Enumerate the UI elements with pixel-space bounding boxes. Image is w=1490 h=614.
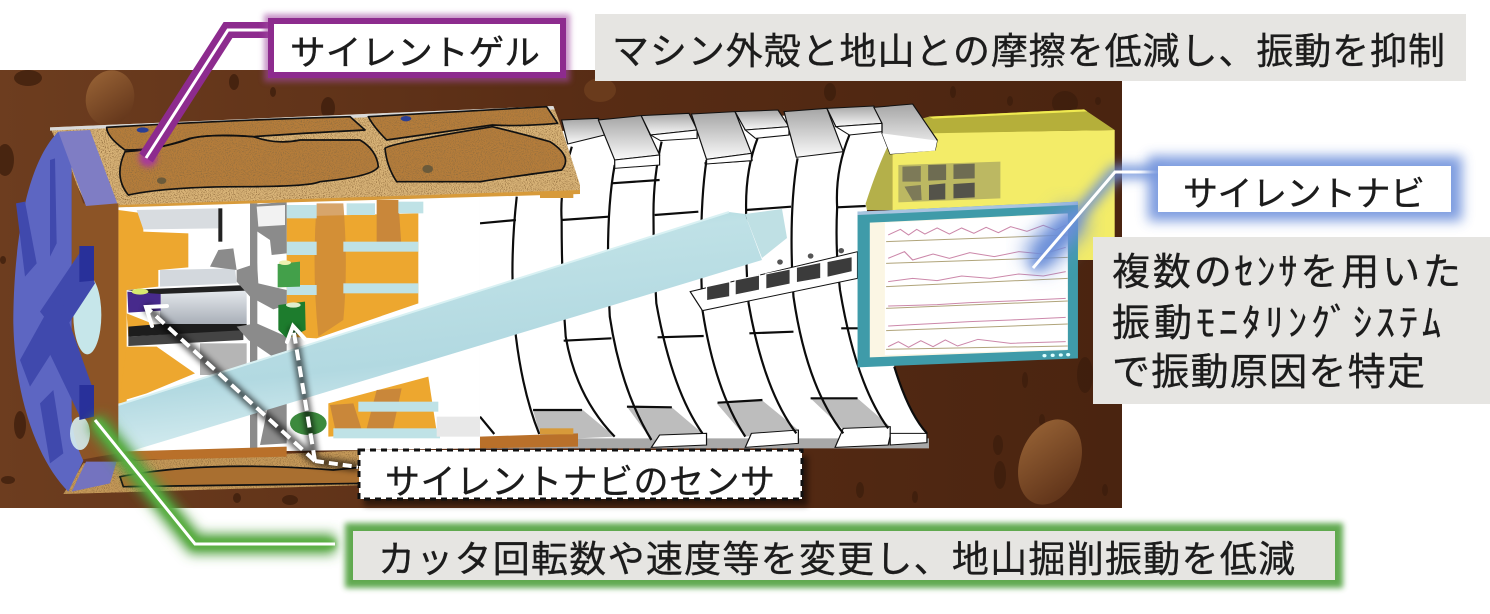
- connector: silent gel: [139, 30, 270, 167]
- ground background with rocks: [0, 65, 1122, 514]
- upper ring tabs: [562, 104, 937, 168]
- lower shell soil: [480, 433, 578, 448]
- screw conveyor pipe: [118, 209, 787, 452]
- erector rail: [690, 248, 858, 311]
- connector: silent navi: [1033, 172, 1160, 268]
- label: silent navi: [1148, 156, 1462, 221]
- label: silent navi: サイレントナビ: [1183, 175, 1425, 214]
- label: silent gel: [264, 14, 570, 82]
- cylinder orange jacks: [118, 210, 437, 437]
- label: silent navi sensor: [359, 450, 808, 506]
- ring joints: [480, 135, 927, 440]
- description: silent navi: 振動ﾓﾆﾀﾘﾝｸﾞｼｽﾃﾑ: [1112, 303, 1441, 345]
- lower key blocks: [651, 427, 927, 447]
- green sensors: [278, 260, 327, 435]
- purple sensor: [127, 289, 161, 313]
- arrows: sensor pointers: [146, 306, 358, 467]
- shield tunnel segments: [480, 104, 937, 448]
- lower ring shading: [480, 398, 929, 448]
- mesh band top: [58, 130, 117, 206]
- front face brown: [72, 170, 118, 460]
- description: silent navi: 複数のｾﾝｻを用いた: [1112, 252, 1461, 294]
- building window: [898, 162, 1000, 202]
- shield shell with silent gel: [50, 106, 580, 494]
- monitor with vibration charts: [858, 202, 1078, 367]
- gel patches: [107, 107, 566, 195]
- label: silent navi sensor: サイレントナビのセンサ: [385, 463, 775, 502]
- description: cutter control: カッタ回転数や速度等を変更し、地山掘削振動を低減: [378, 539, 1295, 580]
- description: silent gel: マシン外殻と地山との摩擦を低減し、振動を抑制: [612, 31, 1445, 72]
- description: cutter control: [345, 523, 1343, 588]
- cutter head: [13, 130, 118, 492]
- cutter hub: [73, 276, 101, 354]
- description: silent navi: で振動原因を特定: [1112, 352, 1425, 394]
- cyan jack rods: [287, 202, 480, 438]
- description: silent navi: [1093, 237, 1490, 404]
- description: silent gel: [595, 14, 1466, 81]
- connector: cutter control: [95, 420, 335, 544]
- cutter spokes: [16, 158, 95, 463]
- yellow building behind tunnel: [866, 109, 1115, 260]
- label: silent gel: サイレントゲル: [290, 34, 540, 73]
- gel patch outlines: [107, 107, 566, 195]
- gray thrust boxes: [127, 208, 247, 346]
- gray frame: [200, 202, 287, 450]
- cutaway machine interior: [118, 195, 480, 453]
